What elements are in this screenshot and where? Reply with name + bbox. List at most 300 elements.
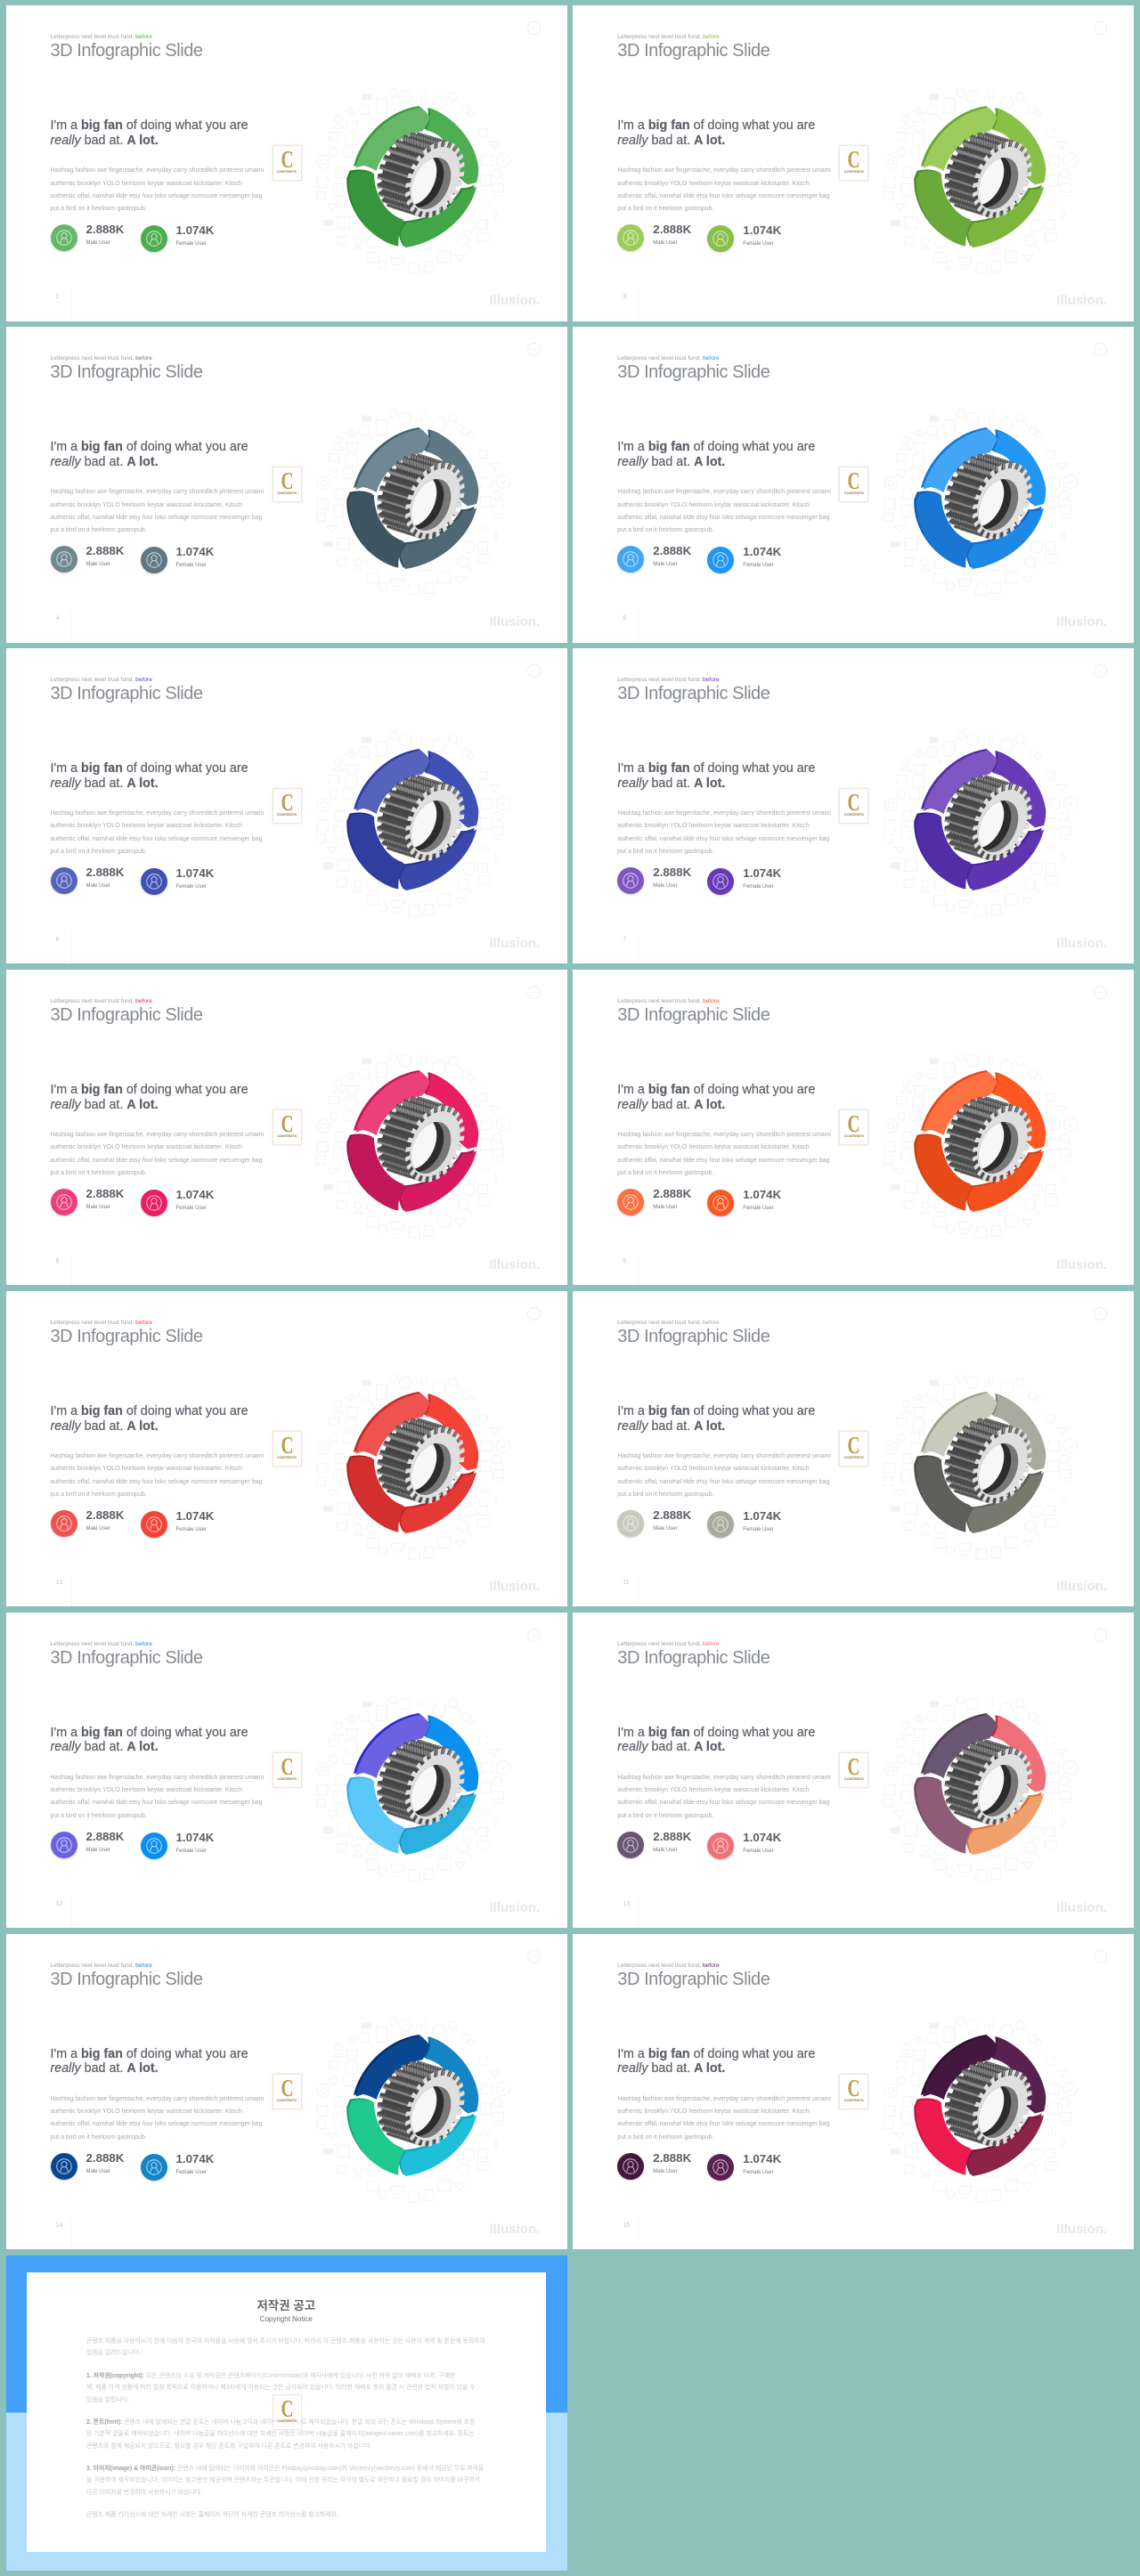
page number: 5 <box>623 615 626 622</box>
subtitle: Letterpress next level trust fund, before <box>617 355 720 362</box>
heading: I'm a big fan of doing what you are <box>617 118 815 133</box>
body text: put a bird on it heirloom gastropub. <box>50 527 147 533</box>
title: 3D Infographic Slide <box>50 1005 203 1025</box>
icon: menu dots <box>1094 664 1107 678</box>
gear ring graphic <box>870 1357 1084 1571</box>
heading: really bad at. A lot. <box>617 455 725 469</box>
label: female user: Female User <box>176 241 207 247</box>
label: male user: Male User <box>86 1526 110 1532</box>
label: female user: Female User <box>176 2170 207 2175</box>
icon: male user <box>617 1832 644 1858</box>
brand: Illusion. <box>1056 1900 1107 1915</box>
body text: authentic brooklyn YOLO heirloom keytar waistcoat kickstarter. Kitsch <box>50 823 242 829</box>
logo badge: copyright: C <box>281 2395 293 2422</box>
logo badge: C <box>281 1432 293 1459</box>
body text: authentic offal, narwhal tilde etsy four loko selvage normcore messenger bag <box>50 1158 263 1164</box>
page number: 12 <box>55 1901 62 1907</box>
heading: really bad at. A lot. <box>50 455 159 469</box>
label: male user: Male User <box>86 2169 110 2174</box>
brand: Illusion. <box>490 936 540 951</box>
body text <box>50 1772 264 1823</box>
gear ring graphic <box>870 1678 1084 1892</box>
label: male user: Male User <box>653 1205 678 1210</box>
logo badge: C <box>281 1110 293 1137</box>
icon: menu dots <box>527 1307 540 1321</box>
logo badge: CONTENTS <box>844 812 864 817</box>
label: female user: Female User <box>743 1849 774 1854</box>
panel: slide 10 red <box>5 1291 567 1606</box>
gear ring graphic <box>884 410 1078 595</box>
logo badge: C <box>848 1753 860 1780</box>
logo badge: C <box>848 2075 860 2101</box>
stat: female users: 1.074K <box>743 1188 781 1201</box>
panel: slide 12 violet and blue <box>5 1613 567 1928</box>
heading <box>617 761 815 791</box>
body text <box>617 1131 831 1176</box>
label: female user: Female User <box>743 1527 774 1532</box>
icon: female user <box>707 2154 734 2181</box>
subtitle: Letterpress next level trust fund, before <box>50 998 152 1004</box>
icon: male user <box>50 1189 77 1215</box>
logo badge <box>839 1431 868 1467</box>
logo badge <box>839 467 868 502</box>
body text <box>617 2093 831 2144</box>
stat: female users: 1.074K <box>176 1831 214 1844</box>
gear ring graphic <box>303 2000 517 2214</box>
logo badge <box>839 1752 868 1788</box>
title: 3D Infographic Slide <box>50 1327 203 1346</box>
subtitle: Letterpress next level trust fund, before <box>50 355 152 362</box>
body text: authentic offal, narwhal tilde etsy four loko selvage normcore messenger bag <box>617 515 829 521</box>
label: male user: Male User <box>653 562 678 567</box>
heading: really bad at. A lot. <box>617 776 725 791</box>
icon: female user <box>141 1832 167 1859</box>
heading <box>50 1404 248 1434</box>
page number: 13 <box>623 1901 630 1907</box>
logo badge: copyright <box>273 2394 301 2430</box>
heading: really bad at. A lot. <box>617 2061 725 2076</box>
heading: I'm a big fan of doing what you are <box>50 440 248 454</box>
body text: authentic brooklyn YOLO heirloom keytar waistcoat kickstarter. Kitsch <box>617 1787 810 1793</box>
body text: authentic brooklyn YOLO heirloom keytar waistcoat kickstarter. Kitsch <box>617 1466 810 1472</box>
copyright intro text: 있음을 알려드립니다. <box>86 2350 141 2356</box>
gear ring graphic <box>303 1678 517 1892</box>
body text: Hashtag fashion axe fingerstache, everyday carry shoreditch pinterest umami <box>50 810 264 817</box>
heading: really bad at. A lot. <box>50 1419 159 1434</box>
page number: 3 <box>623 294 626 300</box>
body text: Hashtag fashion axe fingerstache, everyday carry shoreditch pinterest umami <box>617 167 831 174</box>
subtitle: Letterpress next level trust fund, before <box>617 998 720 1004</box>
icon: female user <box>141 547 167 573</box>
heading: really bad at. A lot. <box>50 1098 159 1112</box>
body text <box>617 1451 831 1501</box>
gear ring graphic <box>884 88 1078 274</box>
logo badge: CONTENTS <box>277 1455 297 1459</box>
logo badge <box>273 1752 301 1788</box>
body text: put a bird on it heirloom gastropub. <box>50 206 147 212</box>
icon: menu dots <box>1094 1950 1107 1963</box>
brand: Illusion. <box>1056 2222 1107 2237</box>
stat: male users: 2.888K <box>653 1508 691 1522</box>
copyright section 1 <box>86 2370 475 2406</box>
stat: female users: 1.074K <box>176 1188 214 1201</box>
logo badge <box>273 1109 301 1145</box>
heading <box>617 1726 815 1755</box>
label: female user: Female User <box>176 1849 207 1854</box>
gear ring graphic <box>884 1052 1078 1238</box>
logo badge: CONTENTS <box>844 2098 864 2102</box>
logo badge <box>273 1431 301 1467</box>
heading: I'm a big fan of doing what you are <box>50 1404 248 1418</box>
panel: slide 6 indigo <box>5 648 567 963</box>
copyright section 2: 콘텐츠와 함께 제공되지 않으므로, 필요할 경우 해당 폰트를 구입하여 다른 폰트로 변경하여 사용하시기 바랍니다. <box>86 2443 371 2450</box>
body text <box>617 488 831 533</box>
title: 3D Infographic Slide <box>50 1970 203 1989</box>
copyright section 2: 된 기본적 글꼴로 제작되었습니다. 네이버 나눔글꼴 라이선스에 대한 자세한 사항은 네이버 나눔글꼴 홈페이지(hangeul.naver.com)를 참고하세요. 폰트는 <box>86 2431 475 2437</box>
body text: authentic brooklyn YOLO heirloom keytar waistcoat kickstarter. Kitsch <box>617 1144 810 1150</box>
label: male user: Male User <box>86 1848 110 1853</box>
stat: male users: 2.888K <box>653 1187 691 1200</box>
subtitle: Letterpress next level trust fund, before <box>617 1962 720 1969</box>
icon: menu dots <box>1094 1629 1107 1642</box>
body text: Hashtag fashion axe fingerstache, everyday carry shoreditch pinterest umami <box>50 1453 264 1459</box>
gear ring graphic <box>303 1357 517 1571</box>
body text: authentic brooklyn YOLO heirloom keytar waistcoat kickstarter. Kitsch <box>50 502 242 508</box>
label: female user: Female User <box>176 563 207 568</box>
icon: female user <box>707 1511 734 1538</box>
stat: male users: 2.888K <box>86 223 124 236</box>
stat: female users: 1.074K <box>176 2152 214 2166</box>
stat: female users: 1.074K <box>743 1509 781 1523</box>
body text: authentic offal, narwhal tilde etsy four loko selvage normcore messenger bag <box>50 1479 263 1485</box>
body text: authentic offal, narwhal tilde etsy four loko selvage normcore messenger bag <box>50 2121 263 2127</box>
stat: female users: 1.074K <box>743 223 781 237</box>
title: 3D Infographic Slide <box>50 362 203 382</box>
page number: 15 <box>623 2223 630 2229</box>
body text: authentic brooklyn YOLO heirloom keytar waistcoat kickstarter. Kitsch <box>50 1466 242 1472</box>
label: male user: Male User <box>653 883 678 889</box>
title: 3D Infographic Slide <box>617 1648 770 1668</box>
stat: female users: 1.074K <box>176 866 214 880</box>
heading: really bad at. A lot. <box>617 1098 725 1112</box>
title: 3D Infographic Slide <box>617 684 770 703</box>
stat: female users: 1.074K <box>176 223 214 237</box>
icon: male user <box>50 2153 77 2180</box>
heading: really bad at. A lot. <box>617 1419 725 1434</box>
panel: slide 9 orange <box>573 970 1134 1285</box>
label: male user: Male User <box>86 883 110 889</box>
icon: female user <box>141 868 167 895</box>
icon: female user <box>707 1832 734 1859</box>
brand: Illusion. <box>1056 614 1107 630</box>
panel: slide 3 light green <box>573 5 1134 321</box>
body text <box>617 167 831 212</box>
icon: female user <box>707 1190 734 1216</box>
copyright section 3: 3. 이미지(image) & 아이콘(icon): 콘텐츠 내에 탑재되는 이미지와 아이콘은 Pixabay(pixabay.com)와 Vecteezy(vecteezy.com) 등에서 제공된 무료 저작물 <box>86 2466 484 2472</box>
panel: slide 8 pink <box>5 970 567 1285</box>
body text: authentic brooklyn YOLO heirloom keytar waistcoat kickstarter. Kitsch <box>617 823 810 829</box>
body text <box>50 2093 264 2144</box>
stat: female users: 1.074K <box>743 2152 781 2166</box>
label: male user: Male User <box>86 1205 110 1210</box>
label: male user: Male User <box>86 240 110 246</box>
heading: really bad at. A lot. <box>50 776 159 791</box>
icon: female user <box>141 225 167 252</box>
heading: I'm a big fan of doing what you are <box>617 761 815 776</box>
body text: Hashtag fashion axe fingerstache, everyday carry shoreditch pinterest umami <box>50 2096 264 2102</box>
body text: authentic offal, narwhal tilde etsy four loko selvage normcore messenger bag <box>617 2121 829 2127</box>
page number: 2 <box>55 294 59 300</box>
label: female user: Female User <box>743 241 774 247</box>
heading <box>50 440 248 469</box>
stat: female users: 1.074K <box>743 866 781 880</box>
copyright title: 저작권 공고 <box>256 2299 315 2312</box>
logo badge: CONTENTS <box>277 1134 297 1138</box>
heading: I'm a big fan of doing what you are <box>50 1726 248 1740</box>
copyright section 2 <box>86 2417 475 2452</box>
body text: authentic brooklyn YOLO heirloom keytar waistcoat kickstarter. Kitsch <box>50 2109 242 2115</box>
copyright section 1: 있음을 알립니다. <box>86 2397 129 2403</box>
logo badge: CONTENTS <box>277 812 297 817</box>
body text <box>50 488 264 533</box>
logo badge: CONTENTS <box>277 1776 297 1781</box>
gear ring graphic <box>870 2000 1084 2214</box>
logo badge: CONTENTS <box>277 491 297 495</box>
heading: really bad at. A lot. <box>617 134 725 148</box>
title: 3D Infographic Slide <box>617 1327 770 1346</box>
body text: authentic offal, narwhal tilde etsy four loko selvage normcore messenger bag <box>617 836 829 842</box>
copyright subtitle: Copyright Notice <box>260 2315 313 2323</box>
logo badge: C <box>281 789 293 816</box>
page number: 4 <box>55 615 59 622</box>
brand: Illusion. <box>1056 1257 1107 1272</box>
page number: 6 <box>55 937 59 943</box>
logo badge: CONTENTS <box>277 169 297 174</box>
panel: slide 7 purple <box>573 648 1134 963</box>
title: 3D Infographic Slide <box>50 41 203 61</box>
icon: menu dots <box>527 986 541 999</box>
label: female user: Female User <box>176 884 207 890</box>
body text <box>617 1772 831 1823</box>
heading: I'm a big fan of doing what you are <box>50 118 248 133</box>
panel: slide 4 blue grey <box>5 327 567 643</box>
subtitle: Letterpress next level trust fund, before <box>50 1641 152 1647</box>
icon: menu dots <box>527 1629 540 1642</box>
copyright intro text <box>86 2336 485 2360</box>
label: male user: Male User <box>86 562 110 567</box>
heading: I'm a big fan of doing what you are <box>617 1726 815 1740</box>
page number: 14 <box>55 2223 62 2229</box>
subtitle: Letterpress next level trust fund, before <box>50 677 152 683</box>
icon: menu dots <box>1094 21 1107 35</box>
icon: female user <box>707 547 734 573</box>
heading: really bad at. A lot. <box>50 134 159 148</box>
body text: Hashtag fashion axe fingerstache, everyday carry shoreditch pinterest umami <box>50 1775 264 1781</box>
body text <box>50 1131 264 1176</box>
heading: I'm a big fan of doing what you are <box>50 1083 248 1097</box>
body text: put a bird on it heirloom gastropub. <box>50 1491 147 1498</box>
logo badge: CONTENTS <box>844 1134 864 1138</box>
copyright section 1: 1. 저작권(copyright): 모든 콘텐츠의 소유 및 저작권은 콘텐츠메이드(Contentmade)와 제작사에게 있습니다. 사전 허락 없이 재배포 이외, 구매한 <box>86 2373 455 2379</box>
stat: male users: 2.888K <box>86 544 124 557</box>
panel: slide 13 mauve and coral <box>573 1613 1134 1928</box>
logo badge <box>273 2074 301 2109</box>
subtitle: Letterpress next level trust fund, before <box>617 677 720 683</box>
logo badge: copyright: CONTENTS <box>277 2418 297 2423</box>
heading <box>50 1083 248 1112</box>
heading: I'm a big fan of doing what you are <box>50 761 248 776</box>
brand: Illusion. <box>1056 1579 1107 1594</box>
icon: female user <box>141 1190 167 1216</box>
page number: 7 <box>623 937 626 943</box>
title: 3D Infographic Slide <box>617 362 770 382</box>
heading: I'm a big fan of doing what you are <box>617 1083 815 1097</box>
icon: menu dots <box>1094 1307 1107 1321</box>
copyright section 2: 2. 폰트(font): 콘텐츠 내에 탑재되는 한글 폰트는 네이버 나눔고딕과 네이버 나눔글꼴로 제작되었습니다. 한글 외의 모든 폰트는 Windows System에 포함 <box>86 2419 475 2426</box>
brand: Illusion. <box>490 2222 540 2237</box>
stat: female users: 1.074K <box>176 545 214 558</box>
stat: male users: 2.888K <box>653 2151 691 2165</box>
icon: male user <box>50 867 77 894</box>
stat: male users: 2.888K <box>86 865 124 879</box>
body text: authentic offal, narwhal tilde etsy four loko selvage normcore messenger bag <box>617 1479 829 1485</box>
heading <box>50 761 248 791</box>
body text: Hashtag fashion axe fingerstache, everyday carry shoreditch pinterest umami <box>617 810 831 817</box>
logo badge <box>273 467 301 502</box>
body text: put a bird on it heirloom gastropub. <box>50 1813 147 1819</box>
icon: male user <box>50 224 77 251</box>
gear ring graphic <box>884 731 1078 917</box>
heading <box>617 118 815 148</box>
icon: menu dots <box>1094 986 1107 999</box>
page number: 8 <box>55 1258 59 1264</box>
body text: authentic offal, narwhal tilde etsy four loko selvage normcore messenger bag <box>50 1800 263 1806</box>
logo badge: C <box>281 2075 293 2101</box>
icon: menu dots <box>527 21 541 35</box>
logo badge: CONTENTS <box>277 2098 297 2102</box>
heading <box>50 2047 248 2076</box>
panel: copyright notice <box>5 2255 567 2571</box>
page number: 9 <box>623 1258 626 1264</box>
body text: authentic brooklyn YOLO heirloom keytar waistcoat kickstarter. Kitsch <box>50 1787 242 1793</box>
logo badge <box>273 145 301 181</box>
copyright section 3: 다른 이미지를 변경하여 사용하시기 바랍니다. <box>86 2490 202 2496</box>
heading <box>617 1404 815 1434</box>
body text: put a bird on it heirloom gastropub. <box>617 1170 713 1176</box>
body text: put a bird on it heirloom gastropub. <box>50 2134 147 2141</box>
label: male user: Male User <box>653 1526 678 1532</box>
body text: Hashtag fashion axe fingerstache, everyday carry shoreditch pinterest umami <box>617 1453 831 1459</box>
body text: authentic brooklyn YOLO heirloom keytar waistcoat kickstarter. Kitsch <box>617 181 810 187</box>
subtitle: Letterpress next level trust fund, before <box>617 1641 720 1647</box>
stat: male users: 2.888K <box>653 865 691 879</box>
title: 3D Infographic Slide <box>617 41 770 61</box>
logo badge: C <box>848 1432 860 1459</box>
gear ring graphic <box>316 731 510 917</box>
subtitle: Letterpress next level trust fund, before <box>50 1962 152 1969</box>
logo badge: CONTENTS <box>844 491 864 495</box>
body text <box>617 810 831 855</box>
icon: male user <box>617 1510 644 1537</box>
icon: female user <box>141 2154 167 2181</box>
body text: put a bird on it heirloom gastropub. <box>617 206 713 212</box>
logo badge <box>839 2074 868 2109</box>
body text: Hashtag fashion axe fingerstache, everyday carry shoreditch pinterest umami <box>617 1132 831 1138</box>
title: 3D Infographic Slide <box>50 1648 203 1668</box>
body text: put a bird on it heirloom gastropub. <box>617 527 713 533</box>
icon: male user <box>617 1189 644 1215</box>
label: female user: Female User <box>743 1206 774 1211</box>
panel: slide 5 blue <box>573 327 1134 643</box>
heading <box>50 118 248 148</box>
body text: put a bird on it heirloom gastropub. <box>617 2134 713 2141</box>
subtitle: Letterpress next level trust fund, before <box>617 34 720 40</box>
body text: authentic offal, narwhal tilde etsy four loko selvage normcore messenger bag <box>50 515 263 521</box>
brand: Illusion. <box>490 1579 540 1594</box>
page number: 10 <box>55 1580 62 1586</box>
body text: authentic brooklyn YOLO heirloom keytar waistcoat kickstarter. Kitsch <box>617 2109 810 2115</box>
body text: authentic offal, narwhal tilde etsy four loko selvage normcore messenger bag <box>617 1158 829 1164</box>
body text: Hashtag fashion axe fingerstache, everyday carry shoreditch pinterest umami <box>50 167 264 174</box>
label: male user: Male User <box>653 240 678 246</box>
icon: female user <box>141 1511 167 1538</box>
icon: menu dots <box>527 343 541 356</box>
copyright section 3 <box>86 2463 484 2499</box>
logo badge: C <box>848 467 860 494</box>
stat: female users: 1.074K <box>176 1509 214 1523</box>
logo badge <box>839 1109 868 1145</box>
icon: male user <box>50 1832 77 1858</box>
body text <box>50 1451 264 1501</box>
body text: Hashtag fashion axe fingerstache, everyday carry shoreditch pinterest umami <box>50 489 264 495</box>
stat: female users: 1.074K <box>743 1831 781 1844</box>
logo badge: CONTENTS <box>844 1455 864 1459</box>
heading <box>617 2047 815 2076</box>
stat: male users: 2.888K <box>653 223 691 236</box>
heading: I'm a big fan of doing what you are <box>50 2047 248 2061</box>
body text: Hashtag fashion axe fingerstache, everyday carry shoreditch pinterest umami <box>617 1775 831 1781</box>
heading: really bad at. A lot. <box>50 1740 159 1754</box>
panel: slide 15 plum and crimson <box>573 1934 1134 2249</box>
heading: I'm a big fan of doing what you are <box>617 440 815 454</box>
icon: male user <box>617 546 644 573</box>
icon: male user <box>50 546 77 573</box>
panel: slide 14 navy and teal <box>5 1934 567 2249</box>
body text <box>50 167 264 212</box>
logo badge: CONTENTS <box>844 169 864 174</box>
heading: really bad at. A lot. <box>617 1740 725 1754</box>
brand: Illusion. <box>1056 936 1107 951</box>
body text: put a bird on it heirloom gastropub. <box>617 1491 713 1498</box>
logo badge: C <box>848 789 860 816</box>
gear ring graphic <box>316 410 510 595</box>
body text: authentic brooklyn YOLO heirloom keytar waistcoat kickstarter. Kitsch <box>50 1144 242 1150</box>
logo badge: CONTENTS <box>844 1776 864 1781</box>
copyright section 1: 재, 제품 가격 상품에 따라 일정 목적으로 이용하거나 제3자에게 이용되는 것은 금지되어 있습니다. 이러한 재배포 행위 발견 시 관련한 법적 처벌이 있을 수 <box>86 2385 475 2391</box>
title: 3D Infographic Slide <box>50 684 203 703</box>
subtitle: Letterpress next level trust fund, before <box>50 34 152 40</box>
logo badge: C <box>281 1753 293 1780</box>
brand: Illusion. <box>490 1900 540 1915</box>
brand: Illusion. <box>490 1257 540 1272</box>
logo badge: C <box>281 146 293 173</box>
body text: authentic offal, narwhal tilde etsy four loko selvage normcore messenger bag <box>50 193 263 199</box>
subtitle: Letterpress next level trust fund, before <box>617 1320 720 1326</box>
brand: Illusion. <box>490 614 540 630</box>
logo badge <box>273 788 301 824</box>
stat: male users: 2.888K <box>86 1508 124 1522</box>
label: male user: Male User <box>653 2169 678 2174</box>
